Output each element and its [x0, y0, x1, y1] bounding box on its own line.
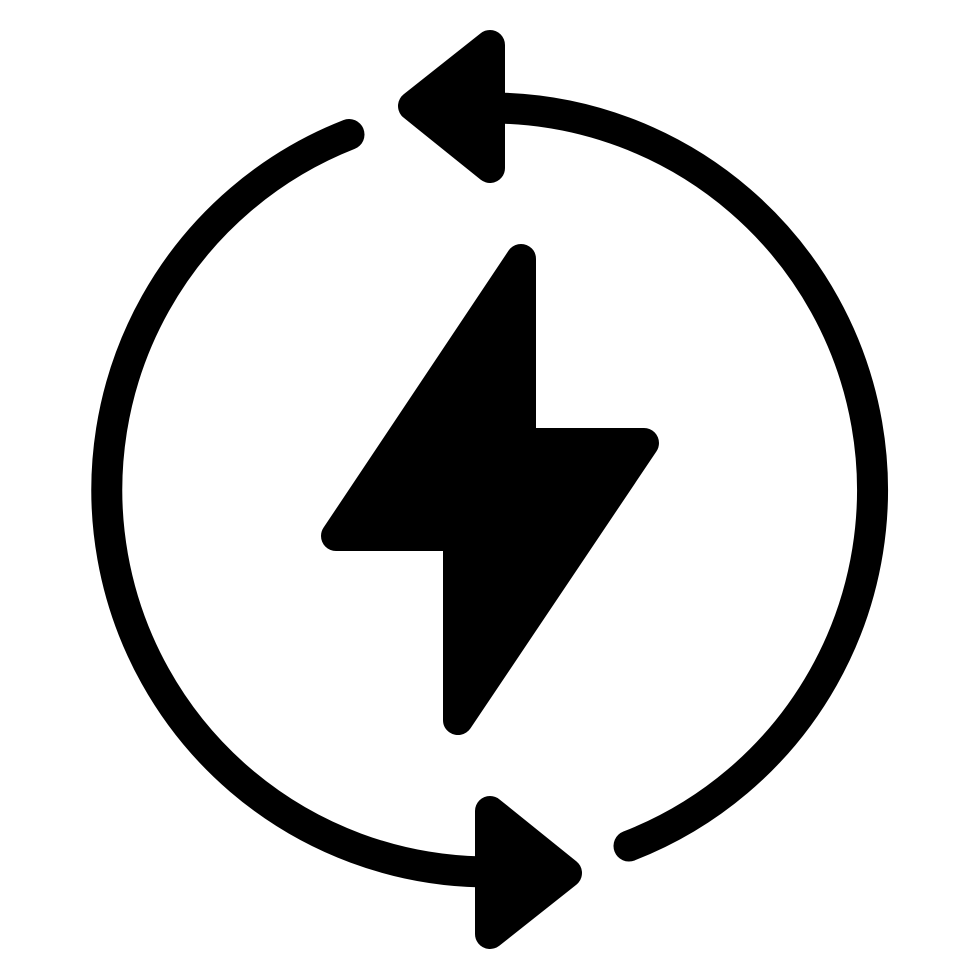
icon: lightning bolt: [336, 259, 644, 720]
arrow: bottom arc with arrowhead: [107, 134, 567, 934]
arrow: top clockwise arc with arrowhead: [413, 45, 873, 846]
